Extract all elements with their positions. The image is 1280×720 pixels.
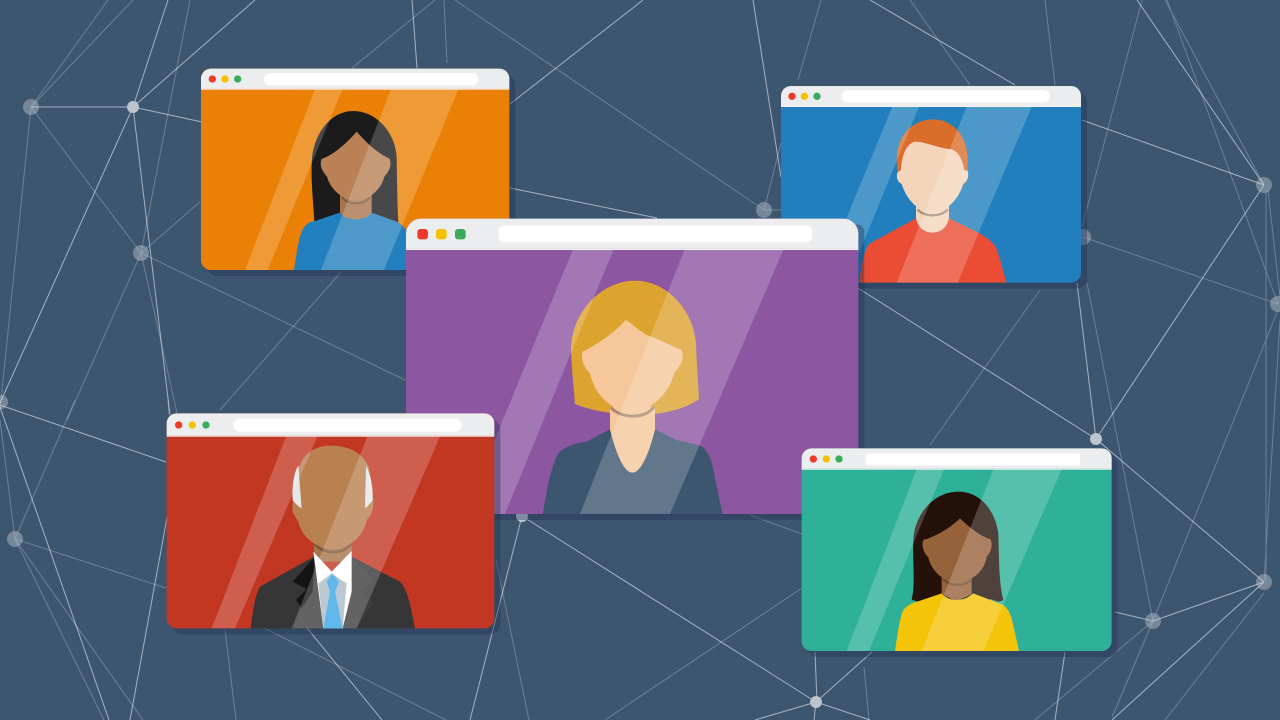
- person: woman with long black hair: [294, 111, 410, 270]
- person: older man in dark suit: [251, 446, 415, 628]
- panel: green video window: [802, 448, 1118, 657]
- panel: orange video window: [201, 69, 515, 276]
- browser title bar: [167, 413, 494, 437]
- window glare: [464, 250, 783, 514]
- panel: purple video window: [406, 219, 864, 520]
- panel: blue video window: [781, 86, 1087, 289]
- window glare: [212, 437, 440, 628]
- person: woman with blonde bob: [543, 281, 723, 514]
- window glare: [847, 469, 1062, 651]
- browser title bar: [802, 448, 1112, 470]
- browser title bar: [781, 86, 1081, 107]
- window glare: [245, 89, 458, 270]
- person: woman with dark brown hair: [895, 492, 1019, 651]
- person: man with red hair: [859, 119, 1007, 283]
- browser title bar: [201, 69, 509, 90]
- browser title bar: [406, 219, 858, 250]
- panel: red video window: [167, 413, 500, 634]
- window glare: [820, 107, 1032, 283]
